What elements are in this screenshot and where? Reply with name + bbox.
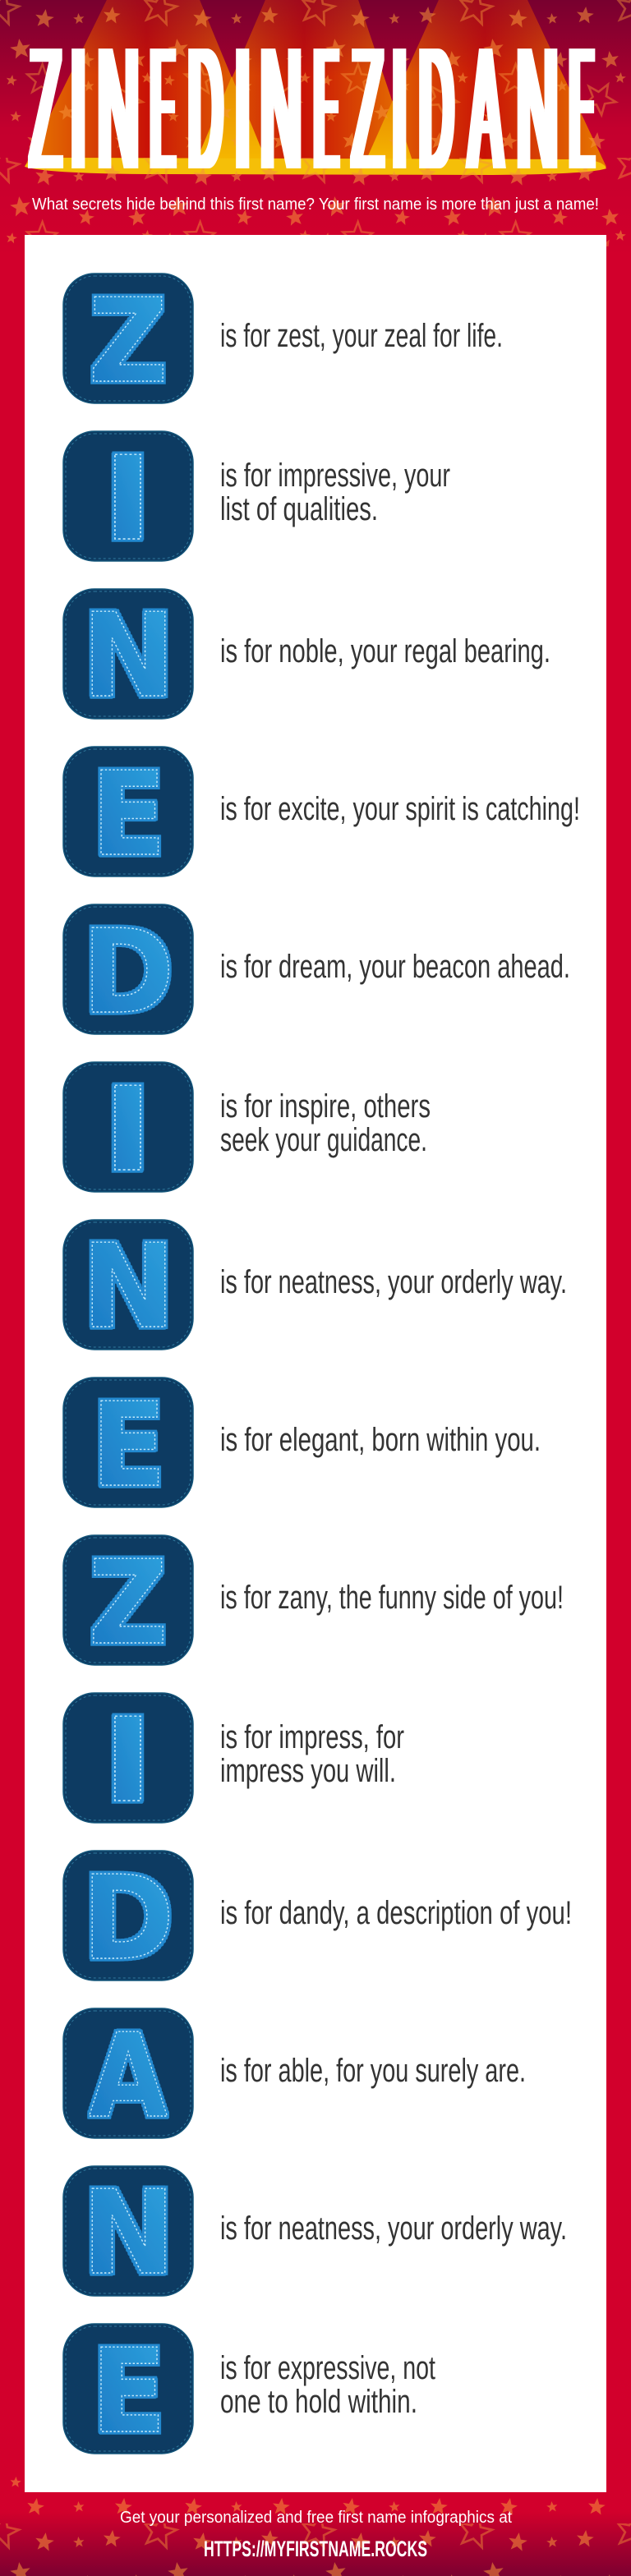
title: A [469,11,502,205]
icon: I [63,1062,193,1198]
icon: D: D [82,904,174,1040]
icon: E: E [91,748,166,882]
icon: E [63,1378,193,1513]
text: expressive: is for expressive, not [220,2350,435,2386]
icon: I [63,1693,193,1828]
icon: E [63,747,193,882]
text: impressive: is for impressive, your [220,458,450,494]
star pattern top [0,0,631,246]
icon: D: D [82,1851,174,1986]
title: N [98,11,139,205]
row N noble [63,588,550,724]
icon: E: E [91,2325,166,2459]
icon: I: I [103,1694,153,1828]
title: I [392,11,408,205]
icon: I: I [103,1063,153,1198]
title: N [260,11,302,205]
row Z zest [63,274,503,409]
row E expressive [63,2324,435,2459]
title: Z [30,11,61,205]
icon: A [63,2008,193,2144]
subtitle: What secrets hide behind this first name? Your first name is more than just a name! [32,196,599,214]
star pattern bottom [0,2472,631,2576]
title [30,11,593,205]
title: E [151,11,174,205]
icon: A: A [89,2009,168,2144]
title: D [419,11,454,205]
icon: I [63,431,193,567]
title: I [71,11,85,205]
title: Z [352,11,383,205]
panel: white card lower [25,849,606,2492]
spotlights [25,0,606,175]
row I inspire [63,1062,431,1198]
row A able [63,2008,526,2144]
title: I [235,11,250,205]
text: inspire: is for inspire, others [220,1088,431,1125]
icon: N: N [82,1219,175,1355]
row D dream [63,904,570,1040]
row I impress [63,1693,404,1828]
row E elegant [63,1378,541,1513]
row Z zany [63,1535,564,1671]
panel: white card [25,235,606,849]
text: impress: impress you will. [220,1753,396,1789]
icon: E [63,2324,193,2459]
icon: N: N [82,588,175,724]
icon: N: N [82,2165,175,2301]
row N neatness [63,1219,567,1355]
icon: Z: Z [89,1536,168,1671]
icon: Z: Z [89,274,168,409]
title: D [189,11,222,205]
text: expressive: one to hold within. [220,2384,417,2420]
icon: Z [63,274,193,409]
text: impress: is for impress, for [220,1719,404,1755]
row N neatness 2 [63,2165,567,2301]
footer url: HTTPS://MYFIRSTNAME.ROCKS [204,2537,427,2561]
row D dandy [63,1851,572,1986]
title: E [315,11,338,205]
footer text: Get your personalized and free first name infographics at [120,2509,512,2527]
icon: Z [63,1535,193,1671]
text: inspire: seek your guidance. [220,1122,427,1158]
row I impressive [63,431,450,567]
row E excite [63,747,580,882]
icon: I: I [103,432,153,567]
text: impressive: list of qualities. [220,491,378,527]
text: zest: is for zest, your zeal for life. [220,318,503,354]
icon: E: E [91,1378,166,1513]
